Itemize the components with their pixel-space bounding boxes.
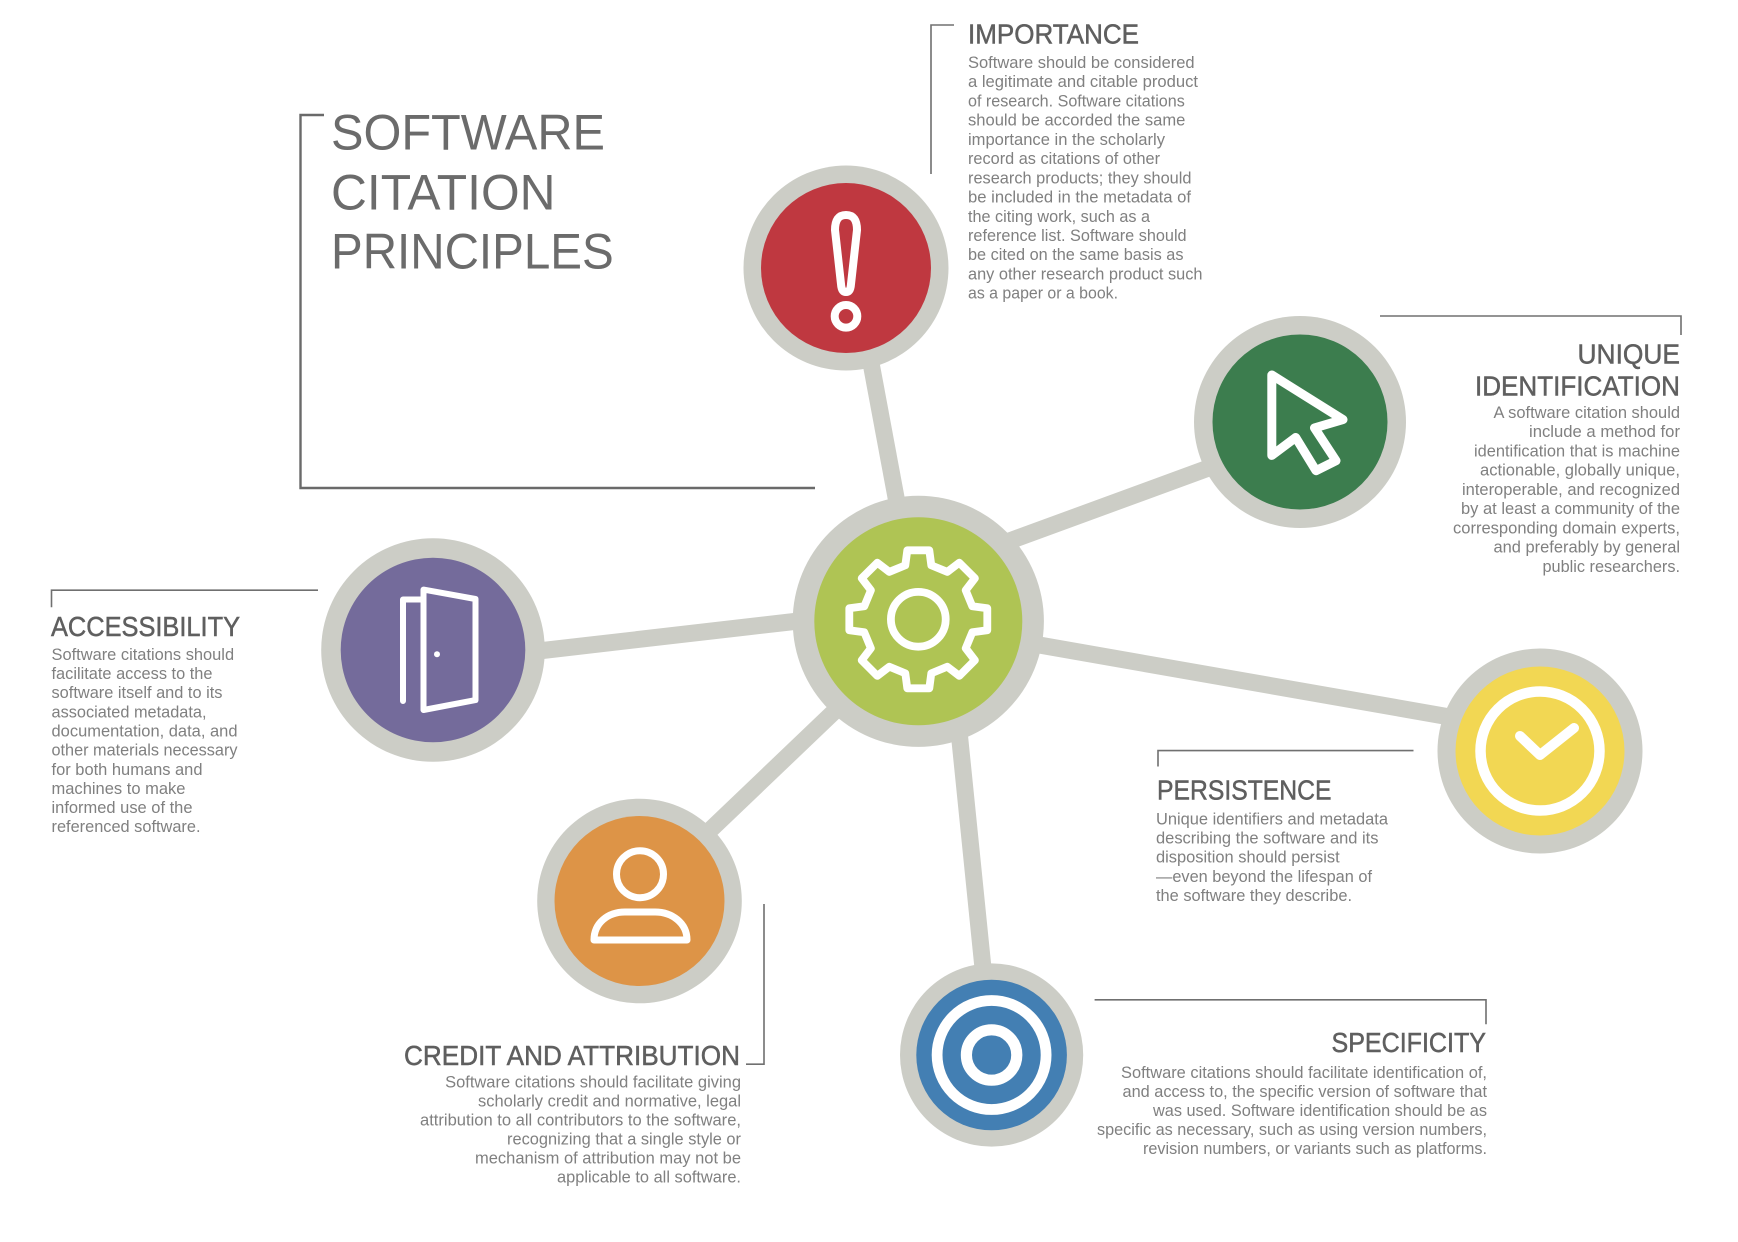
heading: ACCESSIBILITY <box>51 611 240 642</box>
body text: should be accorded the same <box>968 112 1185 130</box>
heading <box>1475 339 1680 402</box>
node: accessibility <box>321 538 545 762</box>
body text: facilitate access to the <box>52 665 212 683</box>
body text: Unique identifiers and metadata <box>1156 810 1389 828</box>
body text: applicable to all software. <box>557 1169 741 1187</box>
body text: informed use of the <box>52 799 192 817</box>
body text: Software citations should <box>52 646 234 664</box>
panel: unique identification <box>1380 316 1681 576</box>
body text: by at least a community of the <box>1461 500 1680 518</box>
node: specificity <box>900 963 1083 1147</box>
panel: accessibility <box>51 590 318 836</box>
heading: PERSISTENCE <box>1157 774 1332 805</box>
body text: recognizing that a single style or <box>507 1131 741 1149</box>
panel: persistence <box>1156 751 1414 905</box>
icon: target <box>937 1000 1046 1110</box>
node: credit and attribution <box>537 799 742 1003</box>
body text: attribution to all contributors to the software, <box>420 1112 741 1130</box>
body text <box>1097 1064 1487 1158</box>
panel: credit and attribution <box>404 904 764 1187</box>
body text <box>420 1074 741 1187</box>
heading: CREDIT AND ATTRIBUTION <box>404 1040 740 1071</box>
body text: research products; they should <box>968 169 1192 187</box>
body text: the citing work, such as a <box>968 208 1151 226</box>
body text: mechanism of attribution may not be <box>475 1150 741 1168</box>
body text <box>52 646 238 836</box>
body text <box>968 54 1202 303</box>
body text: Software should be considered <box>968 54 1195 72</box>
icon: cursor arrow <box>1272 375 1343 471</box>
heading: IDENTIFICATION <box>1475 371 1680 402</box>
icon: open door <box>403 590 476 710</box>
body text: revision numbers, or variants such as platforms. <box>1143 1140 1487 1158</box>
body text: for both humans and <box>52 761 202 779</box>
body text: actionable, globally unique, <box>1480 462 1680 480</box>
panel: title <box>300 104 815 488</box>
body text: specific as necessary, such as using version numbers, <box>1097 1121 1487 1139</box>
body text: record as citations of other <box>968 150 1160 168</box>
body text: Software citations should facilitate giving <box>445 1074 741 1092</box>
panel: importance <box>931 19 1202 303</box>
body text: public researchers. <box>1542 558 1680 576</box>
icon: clock with check <box>1480 692 1600 810</box>
body text: machines to make <box>52 780 186 798</box>
body text: —even beyond the lifespan of <box>1156 868 1372 886</box>
body text: any other research product such <box>968 265 1202 283</box>
title text <box>331 104 614 279</box>
title text: CITATION <box>331 164 556 220</box>
body text: be included in the metadata of <box>968 189 1191 207</box>
node: unique identification <box>1194 316 1406 528</box>
body text <box>1453 404 1681 576</box>
body text: associated metadata, <box>52 703 206 721</box>
heading: UNIQUE <box>1578 339 1680 370</box>
body text: of research. Software citations <box>968 92 1185 110</box>
body text: identification that is machine <box>1474 442 1680 460</box>
body text <box>1156 810 1389 905</box>
body text: corresponding domain experts, <box>1453 520 1680 538</box>
body text: and preferably by general <box>1494 539 1680 557</box>
body text: include a method for <box>1529 423 1681 441</box>
body text: documentation, data, and <box>52 722 238 740</box>
heading: SPECIFICITY <box>1332 1027 1486 1058</box>
title text: SOFTWARE <box>331 104 605 160</box>
icon: person <box>594 851 687 940</box>
body text: software itself and to its <box>52 684 222 702</box>
body text: scholarly credit and normative, legal <box>478 1092 741 1110</box>
body text: the software they describe. <box>1156 887 1352 905</box>
body text: other materials necessary <box>52 742 238 760</box>
connector spokes <box>534 356 1454 974</box>
body text: Software citations should facilitate identification of, <box>1121 1064 1487 1082</box>
node: importance <box>744 166 948 370</box>
body text: referenced software. <box>52 818 200 836</box>
body text: importance in the scholarly <box>968 131 1166 149</box>
body text: disposition should persist <box>1156 849 1340 867</box>
body text: reference list. Software should <box>968 227 1187 245</box>
body text: describing the software and its <box>1156 829 1378 847</box>
title text: PRINCIPLES <box>331 223 614 279</box>
node: central gear <box>793 496 1044 747</box>
body text: a legitimate and citable product <box>968 73 1198 91</box>
body text: and access to, the specific version of software that <box>1122 1083 1487 1101</box>
heading: IMPORTANCE <box>968 19 1139 50</box>
body text: be cited on the same basis as <box>968 246 1184 264</box>
body text: interoperable, and recognized <box>1462 481 1680 499</box>
body text: as a paper or a book. <box>968 285 1118 303</box>
node: persistence <box>1438 648 1642 854</box>
panel: specificity <box>1095 1000 1487 1158</box>
body text: was used. Software identification should be as <box>1152 1102 1487 1120</box>
icon: gear <box>849 550 987 688</box>
icon: exclamation mark <box>835 215 857 328</box>
body text: A software citation should <box>1494 404 1680 422</box>
